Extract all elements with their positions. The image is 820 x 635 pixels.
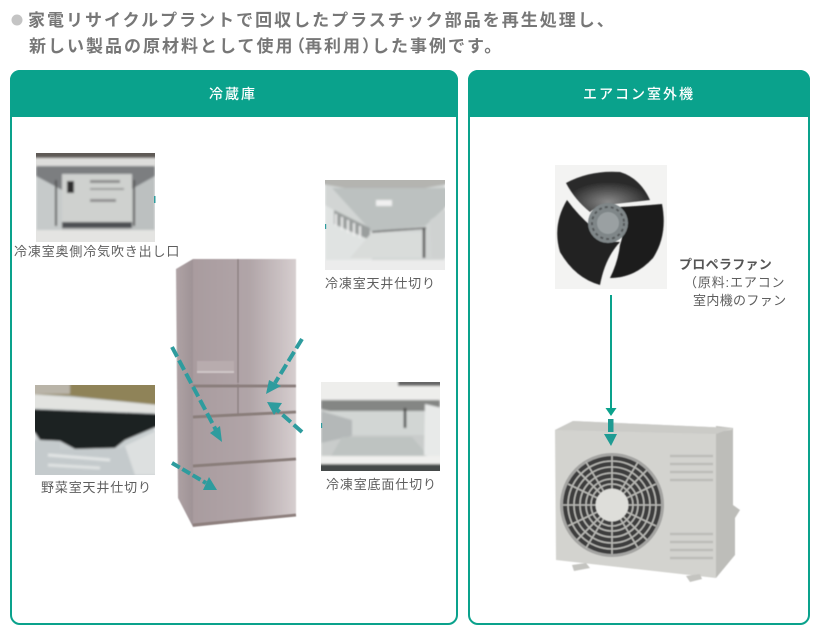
- arrow: freezer ceiling to fridge: [266, 339, 302, 394]
- title: ）: [362, 37, 381, 56]
- arrow: freezer floor to fridge: [267, 402, 302, 432]
- caption: vegetable compartment ceiling partition: 野菜室天井仕切り: [41, 480, 152, 495]
- panel header: refrigerator: [10, 70, 458, 117]
- photo: freezer floor partition: [321, 382, 440, 471]
- fan grille: [560, 453, 664, 557]
- caption: freezer rear cold-air outlet: 冷凍室奥側冷気吹き出し口: [14, 244, 180, 259]
- label: propeller fan: [679, 257, 786, 308]
- unit side: [716, 426, 740, 578]
- title: （: [288, 37, 307, 56]
- panel header: air conditioner outdoor unit: エアコン室外機: [583, 86, 695, 102]
- arrow: outdoor unit dashed arrow: [604, 419, 617, 446]
- photo: outdoor unit: [555, 421, 740, 582]
- marks: photo edge specks: [154, 196, 326, 428]
- title: 家電リサイクルプラントで回収したプラスチック部品を再生処理し、: [28, 10, 616, 30]
- label: propeller fan: （原料:エアコン: [684, 275, 785, 290]
- label: propeller fan: プロペラファン: [679, 257, 772, 272]
- title: [12, 10, 616, 56]
- illustration: refrigerator: [176, 259, 296, 527]
- photo: freezer ceiling partition: [322, 178, 448, 272]
- panel header: air conditioner outdoor unit: [468, 70, 810, 117]
- photo: vegetable compartment ceiling partition: [35, 385, 155, 475]
- label: propeller fan: 室内機のファン: [693, 293, 786, 308]
- vents: [670, 456, 713, 558]
- photo: propeller fan: [555, 165, 667, 289]
- fridge side panel: [176, 259, 193, 527]
- title: した事例です。: [372, 37, 503, 56]
- title: 再利用: [305, 37, 362, 56]
- caption: freezer ceiling partition: 冷凍室天井仕切り: [325, 276, 436, 291]
- panel: air conditioner outdoor unit: [468, 70, 810, 624]
- feet: [572, 563, 590, 571]
- panel header: refrigerator: 冷蔵庫: [209, 86, 257, 102]
- arrow: freezer outlet to fridge: [172, 347, 222, 442]
- photo: freezer rear cold-air outlet: [36, 153, 155, 242]
- arrow: fan to outdoor unit line: [606, 295, 616, 416]
- fridge front: [193, 259, 296, 527]
- unit body: [555, 421, 732, 578]
- caption: freezer floor partition: 冷凍室底面仕切り: [326, 477, 437, 492]
- panel: refrigerator: [10, 70, 458, 624]
- arrow: vegetable ceiling to fridge: [172, 463, 217, 490]
- title: 新しい製品の原材料として使用: [29, 37, 294, 56]
